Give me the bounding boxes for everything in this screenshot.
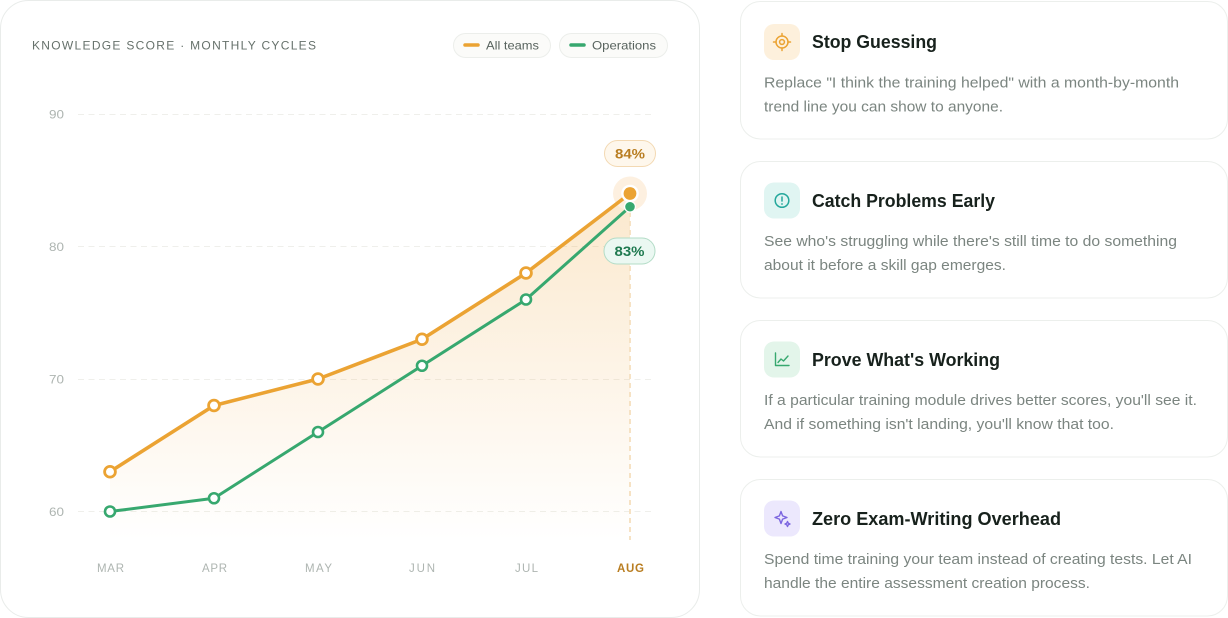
y axis grid and labels: [49, 108, 652, 519]
callout: 84%: 84%: [615, 146, 646, 162]
heading: Catch Problems Early: [812, 191, 995, 211]
panel: stop guessing: [740, 2, 1228, 139]
x axis labels: MAR: [97, 563, 124, 575]
body text: [764, 234, 1177, 274]
endpoint: all teams: [621, 185, 639, 202]
legend: operations: [560, 34, 668, 58]
panel: chart: [0, 0, 700, 618]
chart title: KNOWLEDGE SCORE · MONTHLY CYCLES: [32, 38, 316, 52]
body text: Spend time training your team instead of creating tests. Let AI: [764, 552, 1192, 568]
body text: trend line you can show to anyone.: [764, 100, 1003, 116]
line: all teams: [105, 194, 630, 477]
body text: [764, 552, 1192, 592]
icon: line chart: [764, 342, 800, 378]
callout: 83%: 83%: [614, 243, 645, 259]
y axis grid and labels: 70: [49, 372, 64, 386]
body text: If a particular training module drives better scores, you'll see it.: [764, 393, 1197, 409]
y axis grid and labels: 80: [49, 240, 64, 254]
body text: handle the entire assessment creation process.: [764, 576, 1090, 592]
body text: See who's struggling while there's still time to do something: [764, 234, 1177, 250]
legend: all teams: [454, 34, 550, 58]
body text: about it before a skill gap emerges.: [764, 258, 1006, 274]
icon: target: [764, 24, 800, 60]
august marker line: [629, 194, 631, 540]
body text: Replace "I think the training helped" with a month-by-month: [764, 76, 1179, 92]
heading: Zero Exam-Writing Overhead: [812, 509, 1061, 529]
x axis labels: AUG: [617, 563, 644, 575]
y axis grid and labels: 90: [49, 108, 64, 122]
x axis labels: APR: [202, 563, 227, 575]
body text: And if something isn't landing, you'll know that too.: [764, 417, 1114, 433]
x axis labels: JUN: [409, 563, 435, 575]
legend: operations: Operations: [592, 38, 656, 52]
x axis labels: MAY: [305, 563, 332, 575]
icon: alert: [764, 182, 800, 218]
callout: 84%: [604, 140, 656, 166]
legend: all teams: All teams: [486, 38, 539, 52]
icon: sparkles: [764, 500, 800, 536]
line: operations: [105, 207, 630, 516]
endpoint halo: [613, 176, 647, 210]
y axis grid and labels: 60: [49, 505, 64, 519]
panel: prove what's working: [740, 320, 1228, 457]
panel: catch problems early: [740, 162, 1228, 298]
panel: zero exam-writing overhead: [740, 480, 1228, 616]
body text: [764, 76, 1179, 116]
callout: 83%: [604, 238, 655, 264]
heading: Prove What's Working: [812, 350, 1000, 370]
endpoint: operations: [625, 201, 635, 212]
x axis labels: [97, 563, 644, 575]
body text: [764, 393, 1197, 433]
area under all teams line: [110, 194, 630, 540]
heading: Stop Guessing: [812, 32, 937, 52]
x axis labels: JUL: [515, 563, 539, 575]
